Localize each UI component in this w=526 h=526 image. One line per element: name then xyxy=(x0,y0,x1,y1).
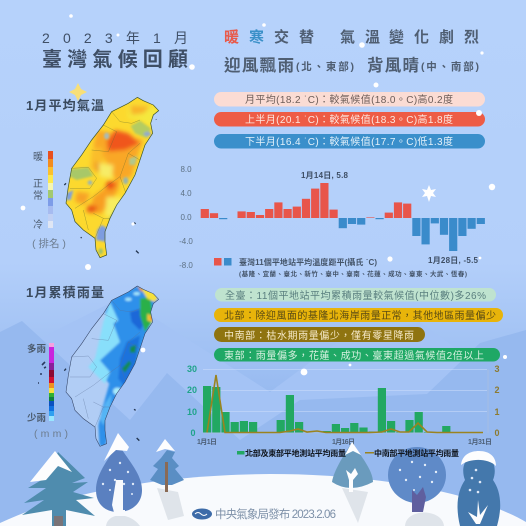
rain pill: central south xyxy=(214,327,425,342)
temperature legend labels: ( 排名 ) xyxy=(32,237,66,250)
warm bars xyxy=(201,183,411,218)
rainfall legend labels xyxy=(27,343,68,440)
rain pill: central south: 中南部：枯水期雨量偏少，僅有零星降雨 xyxy=(224,329,414,342)
temperature colour bar xyxy=(48,151,53,228)
rainfall chart xyxy=(187,364,500,446)
left axis labels: 0 xyxy=(190,428,196,438)
temperature pill: second half: 下半月(16.4 ˙C)：較氣候值(17.7。C)低1.3度 xyxy=(245,135,453,148)
subtitle: 烈 xyxy=(464,29,479,46)
subtitle: 背風晴 xyxy=(367,56,419,75)
y axis labels: 0.0 xyxy=(180,213,192,222)
rainfall chart legend: 北部及東部平地測站平均雨量 xyxy=(245,448,346,458)
tree: triangular xyxy=(332,442,373,523)
outlying islands xyxy=(38,362,46,383)
y axis labels: -8.0 xyxy=(179,261,193,270)
icon: snow crystal xyxy=(422,185,436,202)
icon: bureau logo xyxy=(192,508,212,520)
subtitle: (北、東部) xyxy=(296,60,354,73)
x axis labels xyxy=(197,438,492,446)
snow hill xyxy=(0,474,526,526)
footer: issuer xyxy=(192,507,336,521)
left axis labels: 10 xyxy=(187,407,197,417)
title: 2 0 2 3 年 1 月 xyxy=(42,30,188,46)
subtitle: 化 xyxy=(414,29,429,46)
right axis labels: 0 xyxy=(494,428,500,438)
rain pill: east: 東部：雨量偏多，花蓮、成功、臺東超過氣候值2倍以上 xyxy=(224,349,484,362)
left axis labels: 30 xyxy=(187,364,197,374)
rainfall chart legend xyxy=(237,448,459,458)
subtitle: 溫 xyxy=(365,29,380,46)
background mountains xyxy=(0,298,526,526)
heading: accumulated rainfall: 1月累積雨量 xyxy=(26,285,104,300)
temperature legend labels: 正 xyxy=(33,179,43,190)
subtitle: 變 xyxy=(389,28,404,46)
left axis labels xyxy=(187,364,197,438)
heading: average temperature: 1月平均氣溫 xyxy=(26,98,104,113)
icon: yellow star xyxy=(69,83,87,101)
tree: teardrop xyxy=(96,433,142,526)
subtitle: 暖 xyxy=(224,29,239,46)
rain pill: north: 北部：除迎風面的基隆北海岸雨量正常，其他地區雨量偏少 xyxy=(224,309,496,322)
chart callouts xyxy=(301,171,479,265)
chart legend xyxy=(214,257,467,278)
subtitle: 氣 xyxy=(340,29,355,46)
title: 臺灣氣候回顧 xyxy=(42,48,188,71)
rainfall chart legend: 中南部平地測站平均雨量 xyxy=(374,448,459,458)
rainfall legend labels: ( m m ) xyxy=(34,428,68,440)
subtitle: 迎風飄雨 xyxy=(224,56,294,75)
green rain bars xyxy=(203,386,450,432)
temperature pill: monthly xyxy=(214,92,485,106)
temperature legend labels: 暖 xyxy=(33,150,43,163)
issuer text: 中央氣象局發布 2023.2.06 xyxy=(215,507,336,521)
gold rain line xyxy=(207,375,483,432)
temperature legend labels: 常 xyxy=(33,189,43,202)
y axis labels: 8.0 xyxy=(180,165,192,174)
tree: spruce left xyxy=(22,451,95,526)
right axis labels xyxy=(494,364,500,438)
rainfall colour bar xyxy=(49,343,54,421)
subtitle xyxy=(224,28,479,75)
temperature legend labels: 冷 xyxy=(33,218,43,231)
temperature pill: second half xyxy=(214,134,485,148)
y axis labels: -4.0 xyxy=(179,237,193,246)
temperature anomaly bar chart xyxy=(179,165,485,278)
title xyxy=(42,30,188,71)
chart legend: 臺灣11個平地站平均溫度距平(攝氏 ˙C) xyxy=(239,257,377,267)
y axis labels: 4.0 xyxy=(180,189,192,198)
cool bars xyxy=(219,218,485,251)
chart callouts: 1月28日, -5.5 xyxy=(428,256,479,265)
left axis labels: 20 xyxy=(187,385,197,395)
right axis labels: 3 xyxy=(494,364,500,374)
x axis labels: 1月31日 xyxy=(468,438,492,446)
legend: rainfall xyxy=(27,343,68,440)
map: rainfall xyxy=(64,286,159,447)
temperature pill: first half: 上半月(20.1 ˙C)：較氣候值(18.3。C)高1.8度 xyxy=(245,113,453,126)
legend: temperature xyxy=(32,150,66,250)
snowflakes xyxy=(21,14,507,375)
temperature legend labels xyxy=(32,150,66,250)
tree: small spruce xyxy=(150,439,184,520)
subtitle: 寒 xyxy=(249,28,264,46)
subtitle: 替 xyxy=(299,28,314,46)
rainfall legend labels: 多雨 xyxy=(27,343,47,355)
chart legend: (基隆、宜蘭、臺北、新竹、臺中、臺南、花蓮、成功、臺東、大武、恆春) xyxy=(239,269,467,278)
rain pill: nationwide: 全臺：11個平地站平均累積雨量較氣候值(中位數)多26% xyxy=(225,289,486,302)
temperature pill: first half xyxy=(214,112,485,126)
map: temperature xyxy=(64,97,160,258)
y axis labels xyxy=(179,165,193,270)
tree: round xyxy=(388,447,446,526)
temperature pill: monthly: 月平均(18.2 ˙C)：較氣候值(18.0。C)高0.2度 xyxy=(245,93,453,106)
right axis labels: 1 xyxy=(494,407,500,417)
tree: wavy right xyxy=(458,451,500,526)
rainfall legend labels: 少雨 xyxy=(27,413,47,424)
subtitle: 劇 xyxy=(439,29,454,46)
x axis labels: 1月16日 xyxy=(332,438,355,446)
x axis labels: 1月1日 xyxy=(197,438,217,446)
right axis labels: 2 xyxy=(494,385,500,395)
subtitle: (中、南部) xyxy=(421,60,479,73)
subtitle: 交 xyxy=(274,28,289,46)
chart callouts: 1月14日, 5.8 xyxy=(301,171,349,180)
